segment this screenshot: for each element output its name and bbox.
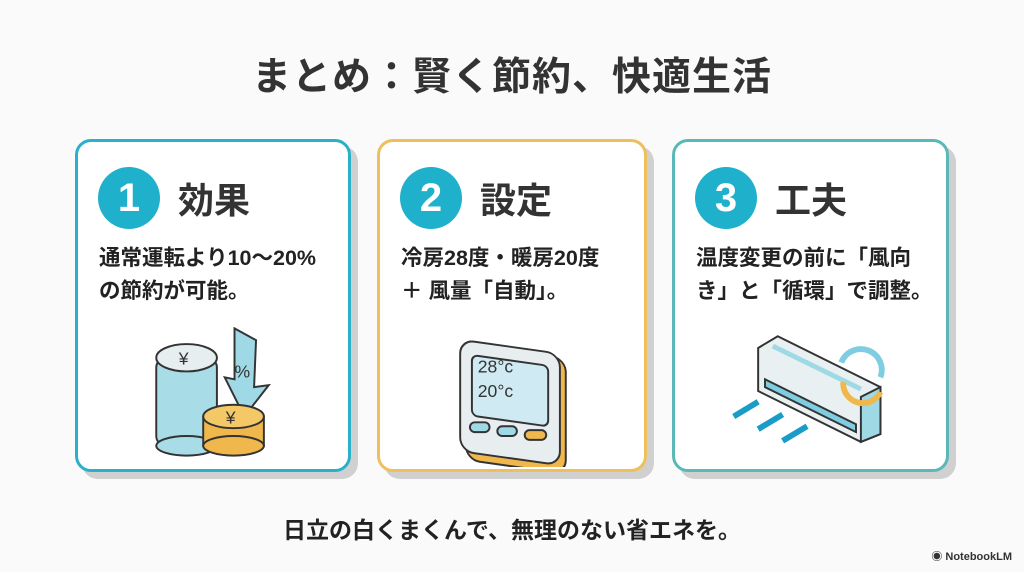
title: まとめ：賢く節約、快適生活 (252, 56, 772, 99)
icon: thermostat (459, 340, 567, 467)
text: effect: の節約が可能。 (99, 279, 250, 303)
text: settings (401, 246, 599, 303)
text: effect: 通常運転より10〜20% (99, 246, 316, 270)
icon: thermostat: 20°c (478, 381, 513, 401)
text: tips: 温度変更の前に「風向 (696, 246, 911, 270)
number badge 3: 3 (715, 176, 737, 220)
panel: tips (672, 139, 949, 472)
brand: NotebookLM: ◉ NotebookLM (931, 551, 1012, 563)
panel: settings (377, 139, 647, 472)
icon: coins with down arrow: ¥ (178, 349, 189, 369)
heading: effect: 効果 (178, 180, 250, 221)
number badge 3 (695, 167, 757, 229)
icon: coins with down arrow: ¥ (225, 407, 236, 427)
number badge 2 (400, 167, 462, 229)
panel: effect (75, 139, 351, 472)
text: settings: 冷房28度・暖房20度 (401, 246, 599, 270)
text: settings: ＋ 風量「自動」。 (401, 279, 568, 303)
heading: settings: 設定 (480, 180, 552, 221)
icon: coins with down arrow (155, 326, 271, 457)
number badge 2: 2 (420, 176, 442, 220)
icon: coins with down arrow: % (235, 361, 251, 381)
text: effect (99, 246, 316, 303)
footer message: 日立の白くまくんで、無理のない省エネを。 (283, 517, 741, 543)
number badge 1: 1 (118, 176, 140, 220)
icon: air conditioner (732, 335, 885, 444)
number badge 1 (98, 167, 160, 229)
icon: thermostat: 28°c (478, 356, 513, 376)
text: tips (696, 246, 933, 303)
heading: tips: 工夫 (775, 180, 847, 221)
text: tips: き」と「循環」で調整。 (696, 279, 933, 303)
